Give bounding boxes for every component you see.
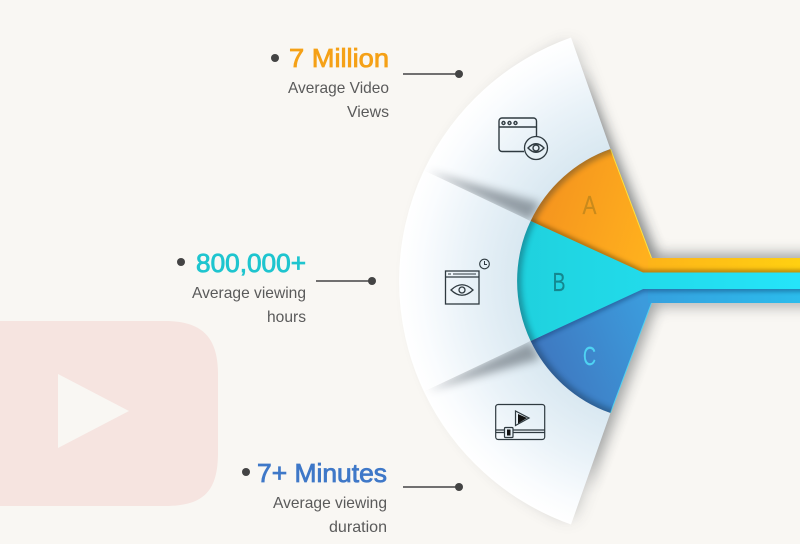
segment C: blue wedge and band: [525, 286, 800, 413]
stat: 7 Million: Average Video: [288, 80, 389, 97]
shade on the bottom segment from the middle segment: [428, 341, 540, 390]
letter B: B: [552, 267, 566, 297]
icon: faded YouTube play button: [0, 321, 218, 506]
shade on the top segment from the middle segment: [428, 172, 540, 221]
panel: bottom segment: [424, 341, 610, 524]
stat: 800,000+: [177, 248, 306, 326]
connector: 7 Million: [403, 70, 463, 78]
chart: fan diagram with three segments: [399, 38, 800, 524]
stat: 7+ Minutes: duration: [329, 519, 387, 536]
stat: 7+ Minutes: 7+ Minutes: [257, 458, 387, 488]
stat: 7 Million: [271, 43, 389, 121]
connector: 800,000+: [316, 277, 376, 285]
segment B: cyan wedge and band: [500, 221, 800, 341]
shadow right of the bottom segment: [590, 300, 800, 490]
connector: 7+ Minutes: [403, 483, 463, 491]
stat: 800,000+: 800,000+: [196, 248, 306, 278]
icon: browser window with eye and clock: [446, 259, 489, 304]
letter C: C: [583, 341, 596, 371]
icon: video player: [496, 404, 545, 440]
soft shadow around the fan: [415, 44, 800, 518]
stat: 7+ Minutes: Average viewing: [273, 495, 387, 512]
panel: top segment: [424, 38, 610, 221]
stat: 7 Million: 7 Million: [289, 43, 389, 73]
letter A: A: [582, 190, 597, 220]
strong shadow right of the top segment: [582, 70, 800, 262]
shadow of white panels along the inner arc: [517, 149, 613, 413]
stat: 800,000+: Average viewing: [192, 285, 306, 302]
icon: browser window with eye: [499, 118, 548, 160]
stat: 800,000+: hours: [267, 309, 306, 326]
segment A: orange wedge and band: [525, 149, 800, 276]
panel: middle segment: [399, 170, 531, 392]
stat: 7 Million: Views: [347, 104, 389, 121]
stat: 7+ Minutes: [242, 458, 387, 536]
shadow of cyan wedge on orange: [531, 221, 800, 272]
shadow of cyan wedge on blue: [531, 289, 800, 341]
